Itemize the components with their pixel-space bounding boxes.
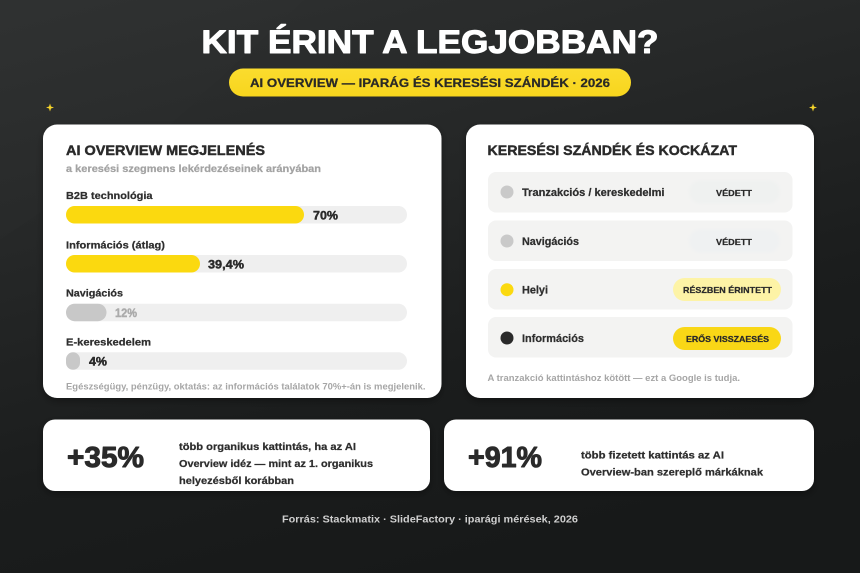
- bar: B2B technológia: 70%: [313, 208, 338, 222]
- row: helyi: RÉSZBEN ÉRINTETT: [683, 285, 773, 295]
- panel footnote: A tranzakció kattintáshoz kötött — ezt a Google is tudja.: [488, 373, 740, 383]
- subtitle pill: [229, 68, 631, 96]
- stat description: helyezésből korábban: [179, 475, 294, 487]
- stat description: [581, 450, 763, 479]
- panel: keresési szándék és kockázat: [466, 124, 814, 398]
- icon: right sparkle: [809, 104, 817, 112]
- row: navigációs: VÉDETT: [716, 237, 753, 247]
- row: helyi: Helyi: [522, 284, 548, 296]
- bar: Információs (átlag): 39,4%: [208, 257, 244, 271]
- row: információs: [488, 317, 792, 358]
- bar: Információs (átlag): Információs (átlag): [66, 239, 165, 251]
- row: információs: ERŐS VISSZAESÉS: [686, 333, 769, 344]
- subtitle pill: AI OVERVIEW — IPARÁG ÉS KERESÉSI SZÁNDÉK · 2026: [250, 77, 610, 90]
- panel subheading: a keresési szegmens lekérdezéseinek arányában: [66, 163, 321, 175]
- panel: AI Overview megjelenés: [43, 124, 442, 398]
- stat number: +91%: [468, 442, 542, 474]
- stat description: [179, 441, 373, 487]
- stat description: Overview idéz — mint az 1. organikus: [179, 458, 373, 470]
- row: tranzakciós: [488, 172, 792, 212]
- stat description: több fizetett kattintás az AI: [581, 450, 724, 462]
- bar: E-kereskedelem: [66, 336, 407, 370]
- bar: E-kereskedelem: E-kereskedelem: [66, 336, 151, 348]
- panel heading: KERESÉSI SZÁNDÉK ÉS KOCKÁZAT: [488, 142, 737, 158]
- stat number: +35%: [67, 442, 144, 474]
- bar: Navigációs: Navigációs: [66, 288, 123, 300]
- bar: E-kereskedelem: 4%: [89, 354, 107, 368]
- stat card: +35%: [43, 420, 430, 491]
- row: információs: Információs: [522, 333, 584, 345]
- panel heading: AI OVERVIEW MEGJELENÉS: [66, 142, 265, 158]
- bar: Információs (átlag): [66, 239, 407, 272]
- bar: Navigációs: 12%: [115, 306, 137, 320]
- bar: B2B technológia: B2B technológia: [66, 190, 153, 202]
- row: navigációs: Navigációs: [522, 236, 579, 248]
- row: tranzakciós: Tranzakciós / kereskedelmi: [522, 187, 664, 199]
- row: navigációs: [488, 220, 792, 261]
- bar: B2B technológia: [66, 190, 407, 224]
- row: tranzakciós: VÉDETT: [716, 188, 753, 198]
- icon: left sparkle: [46, 104, 54, 112]
- row: helyi: [488, 269, 792, 310]
- stat description: több organikus kattintás, ha az AI: [179, 441, 356, 453]
- stat card: +91%: [444, 420, 814, 491]
- title: KIT ÉRINT A LEGJOBBAN?: [202, 24, 658, 60]
- source line: Forrás: Stackmatix · SlideFactory · iparági mérések, 2026: [282, 514, 578, 526]
- bar: Navigációs: [66, 288, 407, 321]
- panel footnote: Egészségügy, pénzügy, oktatás: az információs találatok 70%+-án is megjelenik.: [66, 382, 426, 392]
- stat description: Overview-ban szereplő márkáknak: [581, 467, 763, 479]
